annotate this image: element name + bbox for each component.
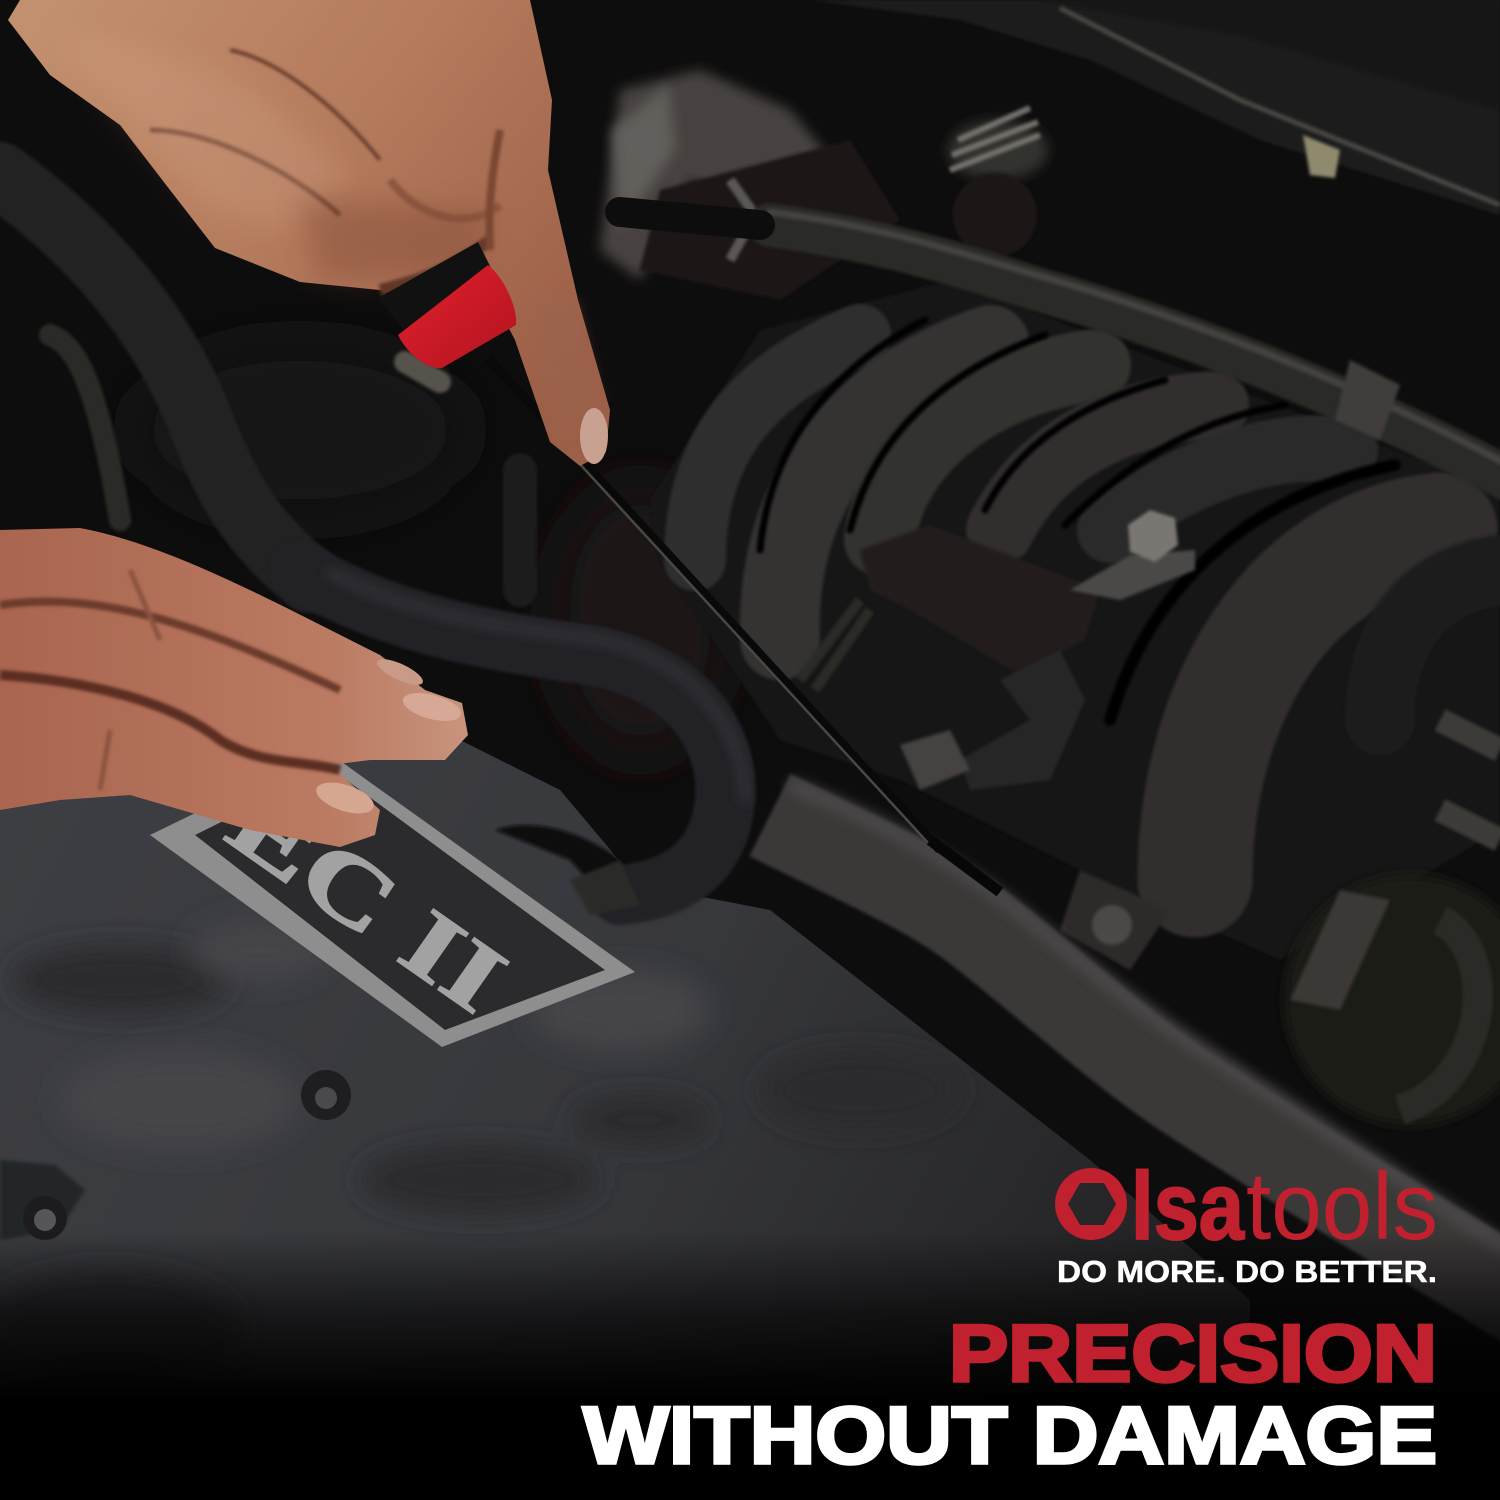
hex bolt — [1128, 510, 1178, 562]
lower left hand — [0, 528, 468, 847]
cover hole — [495, 825, 650, 905]
thumb nail — [580, 408, 608, 464]
cover nameplate — [150, 750, 635, 1047]
logo wordmark bold: lsa — [1131, 1153, 1245, 1260]
long lower hose — [770, 785, 1500, 1305]
engine: intake manifold body — [650, 280, 1500, 960]
screwdriver handle — [378, 242, 516, 368]
engine: lower right canister — [1060, 720, 1500, 1125]
bottom black fade — [0, 1230, 1500, 1400]
cover bolts — [23, 1196, 67, 1240]
nameplate lettering: EC II — [210, 768, 525, 1033]
headline: PRECISION: PRECISION — [949, 1309, 1437, 1399]
engine: upper right hood structure — [810, 0, 1500, 215]
manifold runners — [695, 320, 1500, 880]
headline: WITHOUT DAMAGE: WITHOUT DAMAGE — [583, 1391, 1437, 1481]
logo: Olsatools — [1055, 1153, 1438, 1260]
screwdriver shaft and tip — [488, 358, 1000, 892]
finger creases — [150, 50, 500, 290]
finger gaps — [0, 570, 340, 790]
tagline: DO MORE. DO BETTER. — [1057, 1254, 1437, 1289]
top hand holding screwdriver — [8, 0, 610, 466]
engine: connector bracket and bolt — [800, 510, 1195, 790]
engine: upper rubber tube — [620, 212, 1500, 480]
engine: valve cover — [0, 740, 1250, 1500]
logo wordmark light: tools — [1246, 1153, 1438, 1260]
curved black hose — [300, 570, 745, 915]
engine: silver throttle housing and spring — [600, 70, 1048, 300]
engine: left bay shadows — [130, 340, 730, 760]
fingernails — [400, 688, 464, 726]
logo hex O — [1055, 1168, 1127, 1240]
cover recess ridge — [0, 1160, 85, 1240]
engine: left dark tube and bracket — [0, 175, 520, 590]
mottled cover stains — [0, 945, 960, 1390]
